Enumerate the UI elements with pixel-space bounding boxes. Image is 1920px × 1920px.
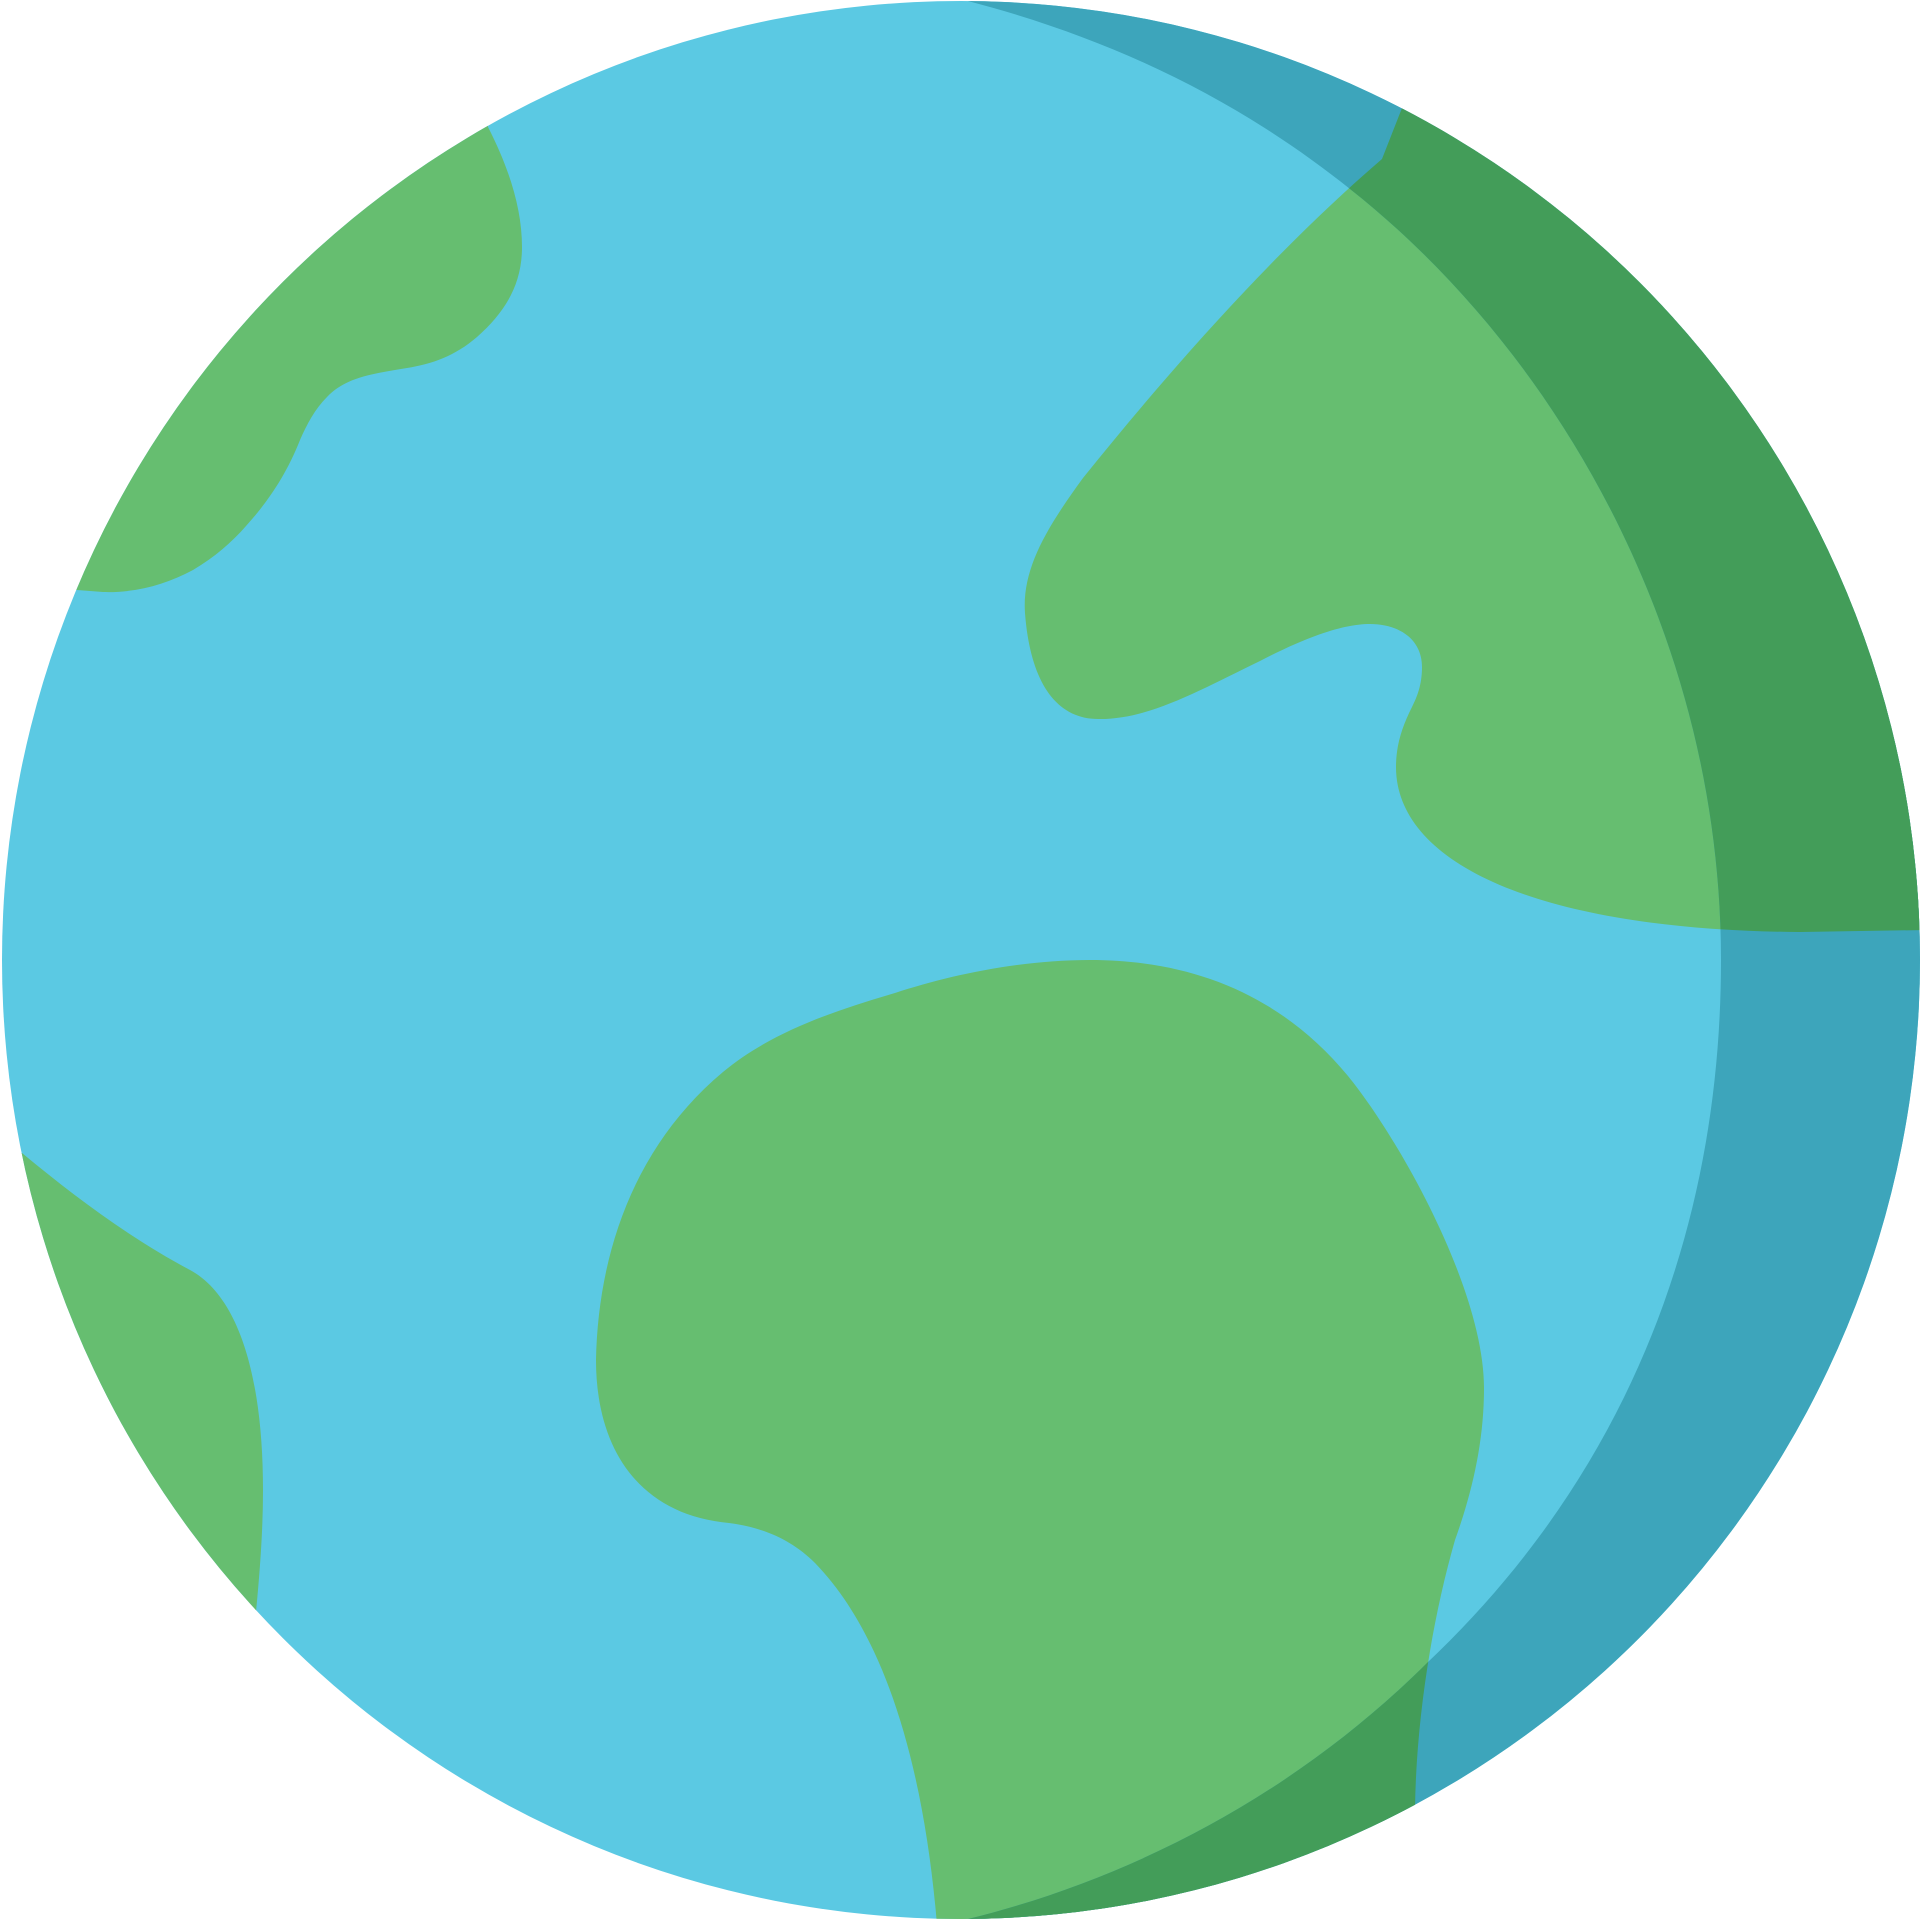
shaded continents	[968, 108, 1920, 1919]
shaded crescent on right side	[968, 1, 1920, 1919]
continent: south-west	[0, 1153, 263, 1612]
shaded ocean	[900, 0, 1920, 1920]
continent: south	[596, 960, 1484, 1920]
continent: north-west	[76, 126, 522, 592]
continent: north-east	[1024, 108, 1920, 930]
